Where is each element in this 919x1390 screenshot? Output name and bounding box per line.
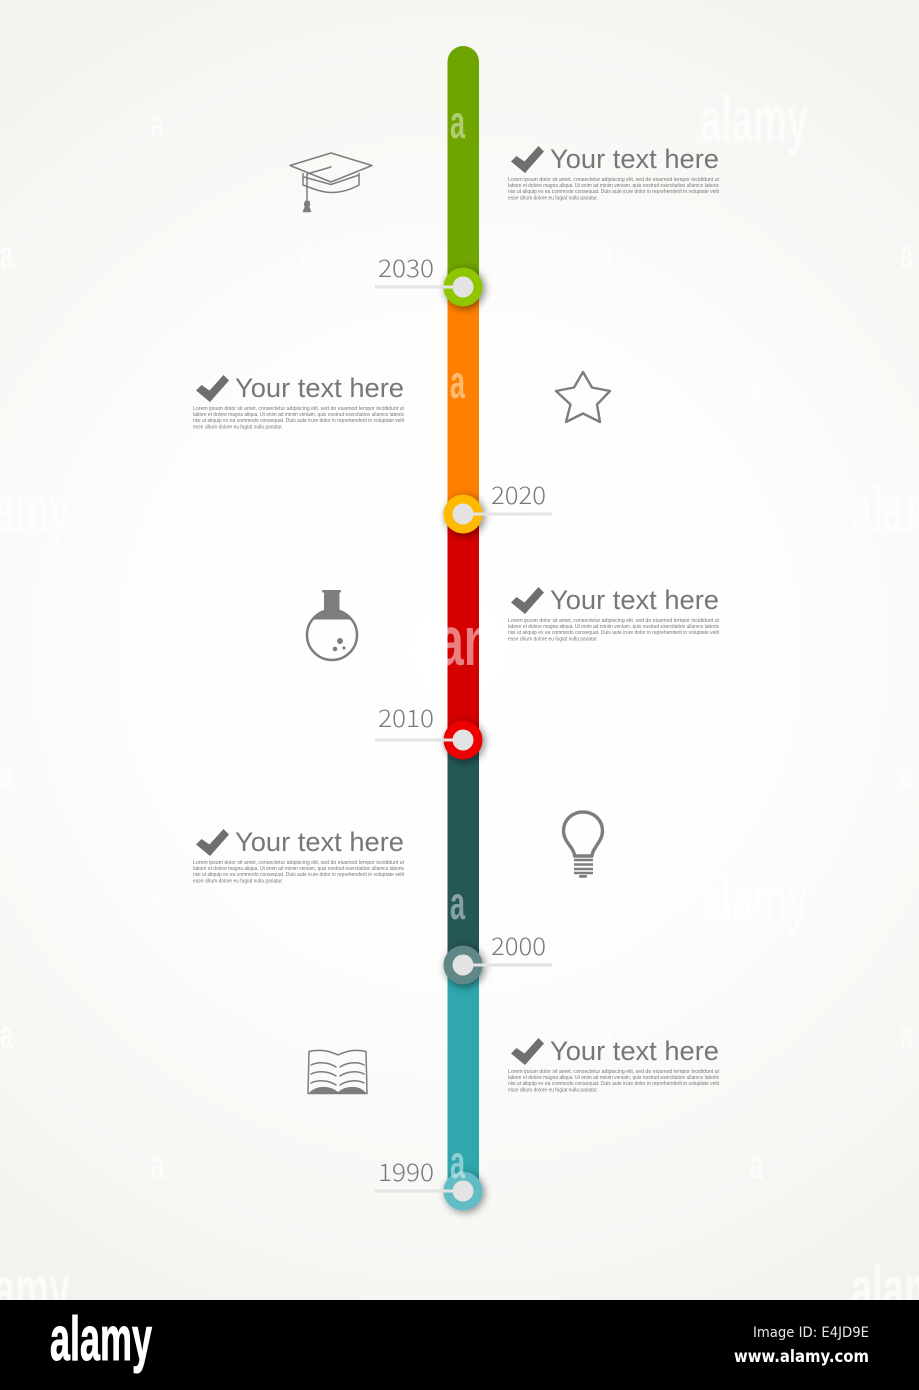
heading: Your text here [550, 1036, 719, 1066]
marker 2030 [375, 249, 485, 309]
body text: Lorem ipsum dolor sit amet, consectetur adipiscing elit, sed do eiusmod tempor incididunt ut [193, 860, 405, 866]
watermarks: a [151, 883, 164, 927]
watermarks: alamy [700, 862, 808, 936]
body text: nisi ut aliquip ex ea commodo consequat. Duis aute irure dolor in reprehenderit in voluptate velit [193, 418, 405, 424]
icon: check mark [196, 829, 229, 856]
body text: esse cillum dolore eu fugiat nulla pariatur. [508, 636, 598, 642]
icon: check mark [511, 1038, 544, 1065]
bar watermark letters: a [450, 877, 465, 929]
icon: light bulb [564, 812, 602, 878]
watermarks: a [0, 753, 13, 797]
body text [193, 406, 405, 430]
heading: Your text here [550, 585, 719, 615]
footer band [0, 1300, 919, 1390]
watermarks: a [300, 753, 313, 797]
image id: Image ID: E4JD9E [753, 1325, 869, 1341]
body text [508, 618, 720, 642]
bar watermark letters: a [450, 356, 465, 408]
heading: Your text here [235, 827, 404, 857]
marker 2020 [444, 476, 552, 536]
bar watermark letters: a [450, 96, 465, 148]
body text: nisi ut aliquip ex ea commodo consequat. Duis aute irure dolor in reprehenderit in voluptate velit [193, 872, 405, 878]
heading: Your text here [550, 144, 719, 174]
body text: esse cillum dolore eu fugiat nulla pariatur. [193, 424, 283, 430]
body text: labore et dolore magna aliqua. Ut enim ad minim veniam, quis nostrud exercitation ullamco laboris [508, 183, 719, 189]
watermarks: a [750, 1143, 763, 1187]
body text: nisi ut aliquip ex ea commodo consequat. Duis aute irure dolor in reprehenderit in voluptate velit [508, 189, 720, 195]
marker 1990 [375, 1136, 485, 1213]
marker 1990: 1990 [378, 1153, 434, 1188]
body text: Lorem ipsum dolor sit amet, consectetur adipiscing elit, sed do eiusmod tempor incididunt ut [193, 406, 405, 412]
text block 2 [193, 373, 405, 430]
watermarks: a [300, 233, 313, 277]
watermarks: a [0, 1013, 13, 1057]
body text: labore et dolore magna aliqua. Ut enim ad minim veniam, quis nostrud exercitation ullamco laboris [193, 866, 404, 872]
body text: nisi ut aliquip ex ea commodo consequat. Duis aute irure dolor in reprehenderit in voluptate velit [508, 630, 720, 636]
body text [508, 177, 720, 202]
watermarks: a [600, 753, 613, 797]
bar segment: green [447, 46, 480, 287]
body text: Lorem ipsum dolor sit amet, consectetur adipiscing elit, sed do eiusmod tempor incididunt ut [508, 177, 720, 183]
body text: Lorem ipsum dolor sit amet, consectetur adipiscing elit, sed do eiusmod tempor incididunt ut [508, 1069, 720, 1075]
website: www.alamy.com [734, 1347, 869, 1367]
marker 2010 [375, 699, 485, 762]
bar segment: orange [448, 298, 479, 503]
watermarks: a [750, 623, 763, 667]
watermarks: a [0, 233, 13, 277]
text block 4 [193, 827, 405, 884]
watermarks: a [750, 362, 763, 406]
marker 2030: 2030 [378, 249, 434, 284]
watermarks: a [600, 1013, 613, 1057]
body text: Lorem ipsum dolor sit amet, consectetur adipiscing elit, sed do eiusmod tempor incididunt ut [508, 618, 720, 624]
icon: check mark [511, 587, 544, 614]
icon: flask [307, 590, 357, 660]
text block 1 [508, 144, 720, 202]
body text [193, 860, 405, 884]
watermarks: a [600, 233, 613, 277]
marker 2000: 2000 [491, 927, 546, 962]
watermarks: a [151, 1143, 164, 1187]
body text: esse cillum dolore eu fugiat nulla pariatur. [508, 196, 598, 202]
bar segment: teal [448, 976, 479, 1180]
bar watermark letters [448, 113, 479, 920]
marker 2010: 2010 [378, 699, 434, 734]
heading: Your text here [235, 373, 404, 403]
watermarks: a [151, 623, 164, 667]
body text: labore et dolore magna aliqua. Ut enim ad minim veniam, quis nostrud exercitation ullamco laboris [508, 1075, 719, 1081]
icon: open book [308, 1050, 367, 1094]
body text: esse cillum dolore eu fugiat nulla pariatur. [193, 878, 283, 884]
body text: labore et dolore magna aliqua. Ut enim ad minim veniam, quis nostrud exercitation ullamco laboris [508, 624, 719, 630]
footer logo: alamy [50, 1305, 152, 1374]
icon: check mark [196, 375, 229, 402]
bar segment: dark teal [448, 751, 479, 954]
marker 1990: a [450, 1136, 465, 1188]
body text [508, 1069, 720, 1094]
text block 3 [508, 585, 720, 642]
marker 2020: 2020 [491, 476, 546, 511]
body text: labore et dolore magna aliqua. Ut enim ad minim veniam, quis nostrud exercitation ullamco laboris [193, 412, 404, 418]
bar segment: red [448, 525, 479, 729]
icon: check mark [511, 146, 544, 173]
marker 2000 [444, 927, 552, 987]
body text: esse cillum dolore eu fugiat nulla pariatur. [508, 1088, 598, 1094]
body text: nisi ut aliquip ex ea commodo consequat. Duis aute irure dolor in reprehenderit in voluptate velit [508, 1081, 720, 1087]
bar watermark letters: an [438, 602, 492, 680]
icon: graduation cap [290, 153, 372, 212]
text block 5 [508, 1036, 720, 1094]
watermarks: a [151, 102, 164, 146]
watermarks: alamy [700, 82, 808, 156]
icon: star [556, 372, 610, 422]
timeline bar [448, 46, 479, 1180]
